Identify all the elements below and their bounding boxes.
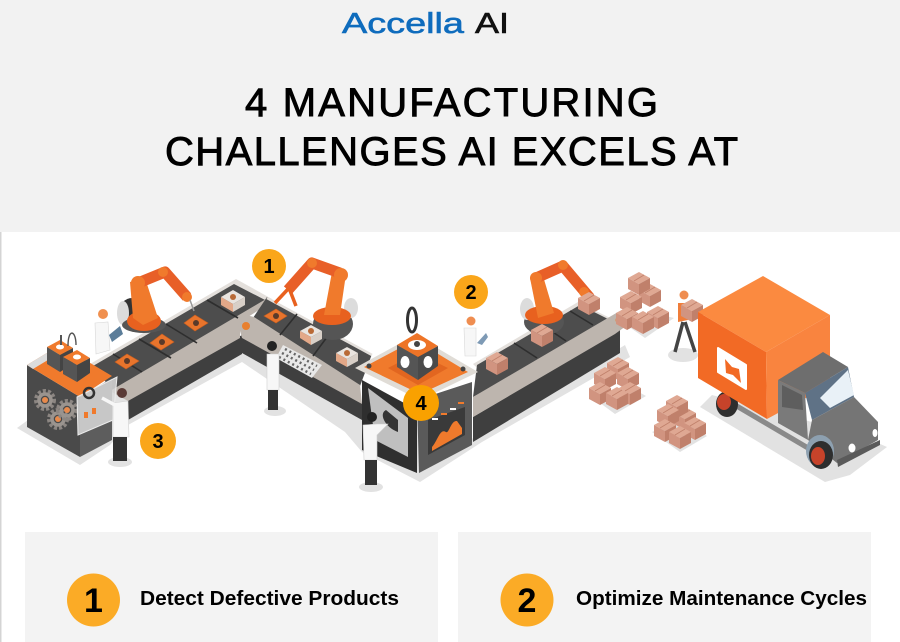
title: 4 MANUFACTURING bbox=[245, 81, 658, 125]
step marker 4: 4 bbox=[415, 393, 427, 415]
box piles bbox=[589, 272, 706, 449]
pile bottom bbox=[654, 395, 706, 449]
logo: Accella AI: AI bbox=[475, 8, 509, 40]
badge 2 bbox=[500, 574, 554, 626]
logo: Accella AI: Accella bbox=[342, 8, 465, 40]
workers bbox=[95, 290, 703, 485]
ground shadows bbox=[17, 312, 887, 492]
worker at control panel bbox=[267, 341, 279, 410]
worker near belt 1 bbox=[95, 309, 123, 354]
title bbox=[165, 81, 738, 174]
step marker 3: 3 bbox=[152, 431, 164, 453]
step marker 4 bbox=[403, 385, 439, 421]
badge 1 bbox=[67, 574, 120, 626]
robot arm 1 bbox=[117, 267, 194, 333]
heading: Optimize Maintenance Cycles: Optimize Maintenance Cycles bbox=[576, 588, 867, 610]
panel: challenge 2 bbox=[458, 532, 871, 642]
step marker 3 bbox=[140, 423, 176, 459]
badge 1: 1 bbox=[84, 582, 103, 620]
conveyor belt 3 bbox=[473, 302, 626, 442]
icon: truck logo bbox=[718, 348, 746, 389]
products on belts bbox=[115, 290, 600, 375]
pile middle bbox=[589, 357, 641, 410]
delivery truck bbox=[698, 276, 880, 469]
gears bbox=[36, 391, 76, 428]
step marker 2 bbox=[454, 275, 488, 309]
illustration: factory production line bbox=[17, 258, 887, 492]
logo: Accella AI bbox=[342, 8, 509, 40]
worker carrying box bbox=[675, 290, 703, 352]
panel: challenge 1 bbox=[25, 532, 438, 642]
step marker 1: 1 bbox=[263, 256, 275, 278]
step marker 2: 2 bbox=[465, 282, 477, 304]
worker at center machine bbox=[363, 412, 388, 485]
step marker 1 bbox=[252, 249, 286, 283]
badge 2: 2 bbox=[518, 582, 536, 620]
cargo box bbox=[698, 276, 830, 419]
worker with tablet bbox=[464, 316, 488, 356]
worker at left machine bbox=[102, 388, 129, 461]
left machine with gears bbox=[27, 333, 117, 457]
conveyor belt 1 bbox=[90, 279, 272, 420]
truck cab bbox=[778, 352, 880, 469]
robot arm 2 bbox=[275, 258, 358, 340]
control panel on belt 2 bbox=[276, 345, 322, 378]
center machine bbox=[355, 308, 478, 473]
title: CHALLENGES AI EXCELS AT bbox=[165, 130, 738, 174]
conveyor belt 2 bbox=[238, 297, 372, 420]
heading: Detect Defective Products: Detect Defective Products bbox=[140, 588, 399, 610]
robot arm 3 bbox=[520, 260, 590, 335]
pile top bbox=[616, 272, 669, 334]
